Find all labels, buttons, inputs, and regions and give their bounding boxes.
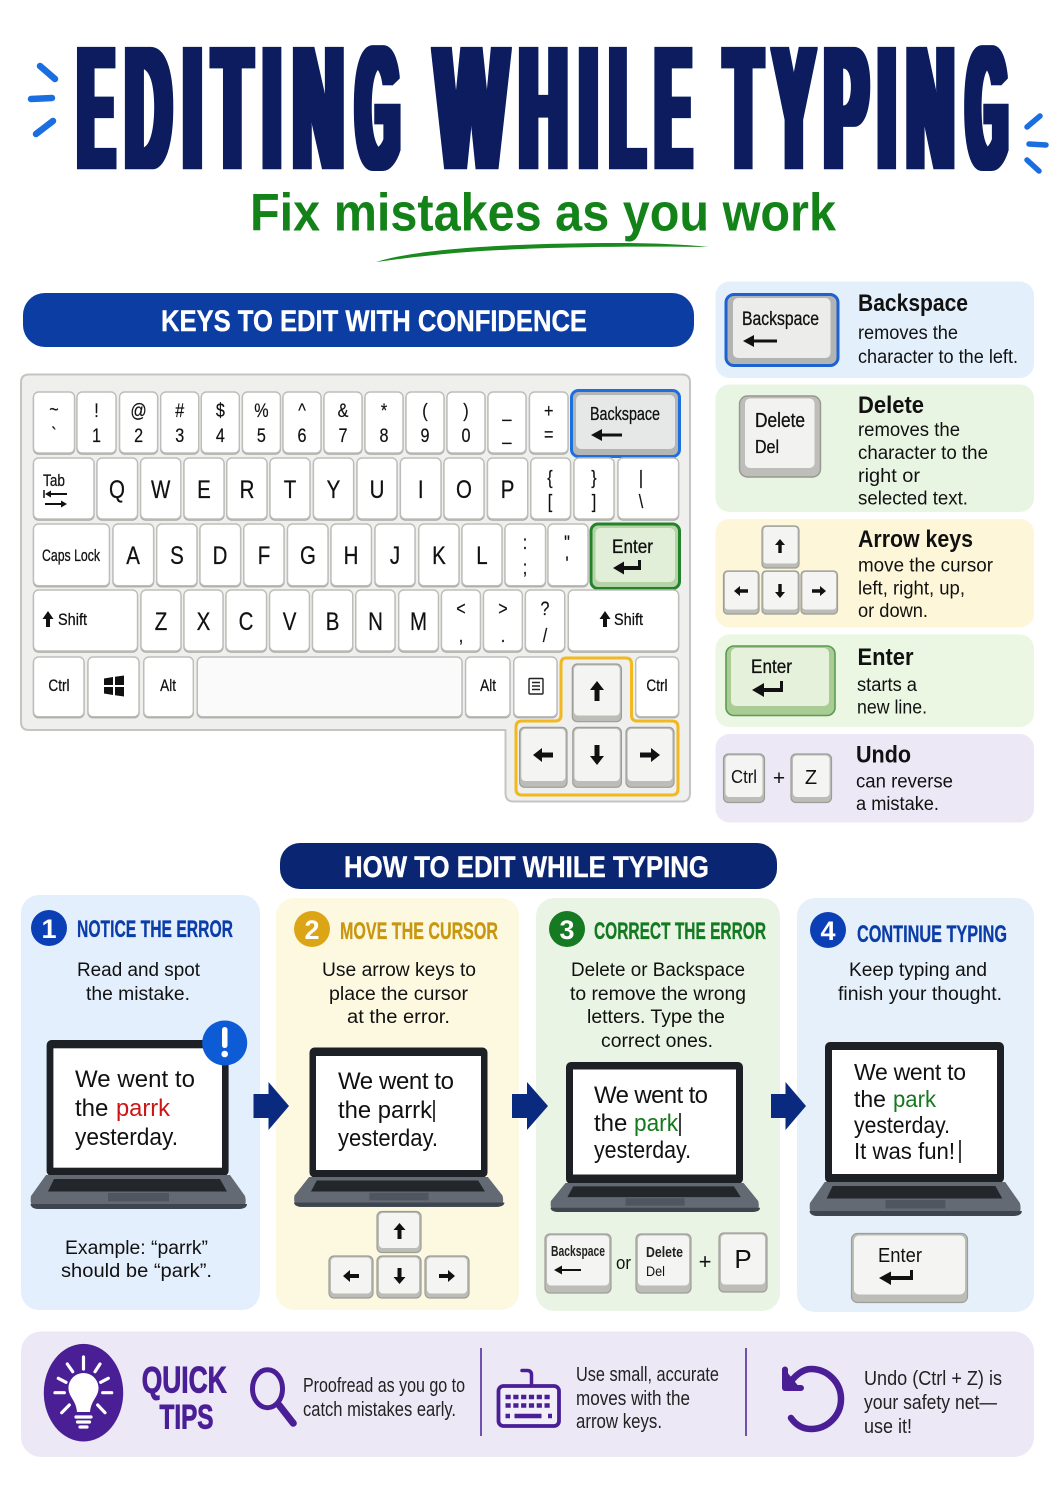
keyboard row 1: 0 [462,425,471,446]
keyboard row 1: ` [51,424,57,445]
step description: letters. Type the [587,1007,725,1028]
keys: backspace or delete plus p: P [734,1244,752,1274]
laptop: We went to [594,1082,708,1109]
keyboard row 5: Alt [160,677,177,695]
keyboard row 1 [34,392,568,453]
icon: delete key: Del [755,437,779,457]
laptop [30,1040,247,1209]
laptop: yesterday. [338,1125,438,1152]
keyboard row 4: N [368,607,383,635]
laptop: yesterday. [594,1137,691,1164]
example text: should be “park”. [61,1261,212,1282]
keyboard row 1: ! [94,400,99,421]
text: undo description [856,742,953,815]
laptop [809,1042,1022,1216]
icon: left title sparkle [31,66,55,134]
step number 4 [810,912,846,948]
laptop [294,1048,504,1207]
arrow: step 1 to 2 [254,1082,289,1130]
text: delete description: selected text. [858,488,968,510]
panel: quick tips [21,1332,1034,1457]
icon: menu key [529,678,543,694]
text: delete description: Delete [858,392,924,419]
heading: keys to edit with confidence [23,293,694,347]
laptop: parrk [116,1095,171,1122]
keyboard row 1: + [544,400,553,421]
step number 2 [294,911,330,947]
step number 4: 4 [820,916,836,946]
keyboard row 4: Z [155,607,167,635]
title: I [580,11,597,206]
keyboard row 2: ] [592,491,596,512]
text: arrow keys description [858,526,994,622]
keyboard row 2: I [418,475,424,503]
title: T [726,11,761,206]
text: delete description [858,392,988,510]
keyboard row 1: ( [422,400,428,421]
keyboard row 2: Tab [43,472,65,490]
keyboard row 4: / [543,625,547,646]
icon: undo arrow [785,1369,841,1429]
laptop: park [893,1086,936,1112]
keyboard row 2: U [370,475,384,503]
keyboard row 2: } [591,467,597,488]
panel: backspace [716,282,1034,378]
panel: step 4 continue typing [797,898,1034,1312]
arrow keys [329,1212,469,1298]
laptop: park [634,1110,679,1137]
keyboard row 1: @ [130,400,147,421]
keyboard row 4: B [326,607,339,635]
keyboard row 5: Ctrl [48,677,70,695]
tip: small accurate moves: moves with the [576,1388,690,1410]
keyboard row 3: ; [523,557,527,578]
keyboard row 2: Y [327,475,340,503]
keyboard row 2: T [284,475,296,503]
keyboard row 2: \ [639,491,643,512]
icon: enter key [726,646,835,716]
title: I [879,11,895,206]
text: enter description [857,644,927,718]
step description [570,960,746,1052]
step heading: CORRECT THE ERROR [594,918,766,945]
step description: Keep typing and [849,960,987,981]
keyboard row 1: _ [502,423,512,445]
step description: Use arrow keys to [322,960,476,981]
laptop: It was fun! [854,1138,955,1164]
step heading: MOVE THE CURSOR [340,918,498,945]
keyboard row 1: ) [463,400,469,421]
icon: ctrl plus z keys: Ctrl [731,767,757,787]
step description [322,960,476,1028]
keyboard row 1: $ [216,400,225,421]
keyboard row 1: 9 [421,425,429,446]
keyboard row 3: F [258,541,270,569]
text: backspace description: Backspace [858,290,968,317]
keyboard row 3: G [300,541,316,569]
keyboard row 1: 5 [257,425,266,446]
keyboard row 3: Caps Lock [42,546,100,565]
keys: backspace or delete plus p: Delete [646,1244,683,1261]
heading: keys to edit with confidence: KEYS TO EDIT WITH CONFIDENCE [161,305,587,338]
keyboard row 4: > [498,598,508,619]
text: delete description: removes the [858,420,960,441]
keyboard row 1: 4 [216,425,225,446]
key: enter highlighted: Enter [612,537,654,558]
title: G [357,11,399,206]
keyboard row 2: { [547,467,553,488]
keyboard row 3: H [344,541,358,569]
title: Y [774,11,814,206]
title: D [126,11,171,206]
key: backspace highlighted: Backspace [590,404,660,424]
step description: correct ones. [601,1031,713,1052]
tip: small accurate moves: arrow keys. [576,1411,662,1433]
keys: backspace or delete plus p: or [616,1253,631,1273]
keyboard row 1: 2 [134,425,143,446]
title: I [263,11,280,206]
keyboard row 4: X [197,607,210,635]
key: backspace highlighted [572,390,680,456]
laptop: the [594,1110,627,1137]
title: N [907,11,954,206]
keyboard row 1: 1 [92,425,101,446]
icon: ctrl plus z keys: Z [805,767,817,789]
keys: backspace or delete plus p: Backspace [551,1243,605,1260]
keyboard row 1: 6 [298,425,307,446]
keyboard row 3 [34,524,588,586]
icon: right title sparkle [1027,116,1046,171]
keyboard row 1: _ [502,400,512,422]
panel: step 3 correct the error [536,898,780,1311]
example text: Example: “parrk” [65,1238,208,1259]
title: P [825,11,867,206]
panel: step 1 notice the error [21,895,260,1310]
keyboard row 4 [34,590,679,651]
keyboard row 3: K [432,541,446,569]
keyboard row 1: = [544,424,553,445]
subtitle underline swoosh [376,243,709,262]
text: arrow keys description: Arrow keys [858,526,973,553]
panel: step 2 move the cursor [276,898,519,1310]
keyboard row 3: ' [565,553,569,574]
keyboard row 3: D [213,541,227,569]
key: enter: Enter [878,1245,922,1267]
keyboard row 3: A [126,541,141,569]
keyboard row 3: S [170,541,184,569]
laptop: the [75,1095,108,1122]
keys: backspace or delete plus p: Del [646,1263,665,1279]
tip: undo: Undo (Ctrl + Z) is [864,1368,1002,1390]
tip: proofread: Proofread as you go to [303,1375,465,1397]
text: enter description: Enter [858,644,914,671]
arrow: step 3 to 4 [771,1082,806,1130]
keyboard row 2 [34,458,679,519]
arrow: step 2 to 3 [512,1082,548,1130]
step description: Read and spot [77,960,201,981]
example text [61,1238,212,1282]
keyboard row 2: | [639,467,643,488]
heading: how to edit while typing [280,843,777,889]
laptop: yesterday. [854,1112,950,1138]
laptop [550,1062,760,1212]
step description: to remove the wrong [570,984,746,1005]
keyboard row 2: [ [548,491,552,512]
icon: enter key: Enter [751,657,793,678]
icon: arrow keys [724,526,838,614]
step number 3: 3 [559,915,575,945]
keyboard row 1: 7 [339,425,347,446]
keyboard row 5 [34,657,679,717]
step number 1 [31,910,67,946]
laptop: We went to [854,1059,966,1085]
tip: undo [864,1368,1002,1438]
title: T [214,11,251,206]
text: enter description: new line. [857,698,927,718]
text: delete description: right or [858,466,921,487]
panel: delete [716,384,1034,512]
quick tips heading [142,1360,227,1436]
step description: the mistake. [86,984,190,1005]
step description [838,960,1002,1005]
keyboard row 5: Ctrl [646,677,668,695]
text: backspace description: character to the left. [858,347,1018,368]
text: undo description: can reverse [856,772,953,792]
panel: arrow keys [716,519,1034,628]
icon: delete key: Delete [755,410,805,432]
keyboard row 4: C [239,607,253,635]
icon: keyboard [498,1370,559,1426]
keyboard row 4: < [456,598,466,619]
icon: light bulb [44,1344,123,1441]
text: undo description: Undo [856,742,911,768]
keyboard row 2: O [456,475,472,503]
text: arrow keys description: or down. [858,601,928,622]
keyboard row 4: Shift [614,610,643,629]
title: H [519,11,567,206]
heading: how to edit while typing: HOW TO EDIT WHILE TYPING [344,851,709,884]
title: N [293,11,343,206]
keyboard row 4: M [410,607,427,635]
text: arrow keys description: move the cursor [858,556,994,576]
icon: backspace key [726,294,838,366]
key: enter [852,1234,968,1302]
icon: alert badge [202,1020,247,1066]
keyboard row 4: V [283,607,297,635]
text: undo description: a mistake. [856,794,939,815]
panel: undo [716,734,1034,822]
tip: proofread: catch mistakes early. [303,1399,456,1421]
title: E [656,11,690,206]
keyboard row 5: Alt [480,677,497,695]
tip: small accurate moves [576,1364,719,1433]
laptop: the parrk [338,1097,433,1124]
keyboard row 1: 8 [380,425,389,446]
tip: undo: your safety net— [864,1392,997,1414]
step description [77,960,201,1005]
keyboard row 1: * [381,400,387,421]
keyboard row 2: E [197,475,211,503]
text: arrow keys description: left, right, up, [858,578,965,600]
step description: at the error. [347,1007,450,1028]
step number 2: 2 [304,915,320,945]
icon: ctrl plus z keys [724,754,832,802]
keyboard row 3: : [523,532,527,553]
keyboard row 2: R [240,475,254,503]
keyboard row 1: # [175,400,184,421]
panel: enter [716,634,1034,727]
laptop: We went to [338,1068,454,1095]
arrow key cluster [516,658,678,795]
keyboard row 3: J [390,541,400,569]
text: enter description: starts a [857,675,917,696]
key: enter highlighted [591,524,680,588]
tip: undo: use it! [864,1416,912,1438]
laptop: We went to [75,1066,195,1093]
keyboard row 1: ~ [49,399,59,420]
title: E [78,11,114,206]
step heading: NOTICE THE ERROR [77,916,233,943]
text: backspace description: removes the [858,323,958,344]
title: W [436,11,507,206]
keyboard row 4: , [459,625,463,646]
keyboard row 1: 3 [175,425,184,446]
keys: backspace or delete plus p [545,1233,767,1293]
keys: backspace or delete plus p: + [699,1249,711,1274]
keyboard row 3: L [476,541,488,569]
text: backspace description [858,290,1018,368]
quick tips heading: QUICK [142,1360,227,1400]
keyboard row 1: & [338,400,349,421]
step number 3 [549,911,585,947]
icon: backspace key: Backspace [742,309,819,330]
keyboard row 1: ^ [298,400,307,421]
title: I [184,11,201,206]
keyboard row 4: . [501,625,505,646]
keyboard row 4: Shift [58,610,87,629]
keyboard row 4: ? [541,598,550,619]
keyboard row 2: Q [109,475,125,503]
step description: finish your thought. [838,984,1002,1005]
icon: ctrl plus z keys: + [773,767,785,790]
subtitle: Fix mistakes as you work [250,184,836,242]
keyboard row 2: W [151,475,171,503]
icon: windows logo [104,676,124,696]
quick tips heading: TIPS [160,1398,214,1436]
panel: keyboard [21,374,690,802]
step number 1: 1 [41,914,57,944]
keyboard row 3: " [564,532,570,553]
keyboard row 2: P [501,475,514,503]
laptop: the [854,1086,886,1112]
text: delete description: character to the [858,443,988,464]
step description: place the cursor [329,984,469,1005]
tip: proofread [303,1375,465,1421]
laptop: yesterday. [75,1124,178,1151]
icon: magnifier [252,1370,293,1423]
tip: small accurate moves: Use small, accurate [576,1364,719,1386]
step description: Delete or Backspace [571,960,745,981]
icon: delete key [740,396,820,477]
title: L [610,11,644,206]
keyboard row 1: % [254,400,269,421]
